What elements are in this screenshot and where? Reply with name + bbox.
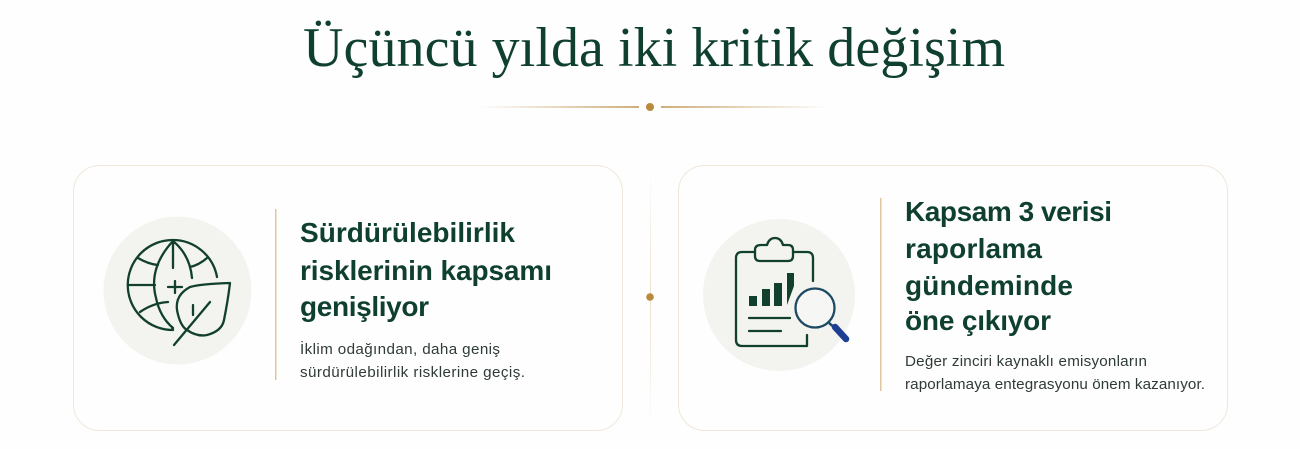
heading: Kapsam 3 verisi <box>905 196 1112 227</box>
text block <box>300 340 525 381</box>
icon: clipboard with chart and magnifier <box>703 219 855 371</box>
heading <box>300 217 552 322</box>
heading <box>905 196 1112 336</box>
text block: İklim odağından, daha geniş <box>300 340 500 358</box>
text block: sürdürülebilirlik risklerine geçiş. <box>300 364 525 381</box>
text block <box>905 353 1205 393</box>
panel: left card <box>74 166 622 430</box>
accent rule <box>880 198 882 391</box>
heading: genişliyor <box>300 291 429 322</box>
heading: gündeminde <box>905 270 1073 301</box>
title: Üçüncü yılda iki kritik değişim <box>303 17 1005 79</box>
heading: öne çıkıyor <box>905 305 1051 336</box>
text block: Değer zinciri kaynaklı emisyonların <box>905 353 1147 370</box>
heading: risklerinin kapsamı <box>300 255 552 286</box>
panel: right card <box>678 166 1228 430</box>
accent rule <box>275 209 276 380</box>
heading: raporlama <box>905 233 1042 264</box>
title ornament <box>480 103 829 111</box>
text block: raporlamaya entegrasyonu önem kazanıyor. <box>905 376 1205 393</box>
heading: Sürdürülebilirlik <box>300 217 515 248</box>
centre divider <box>646 166 654 430</box>
icon: globe and leaf <box>104 216 252 364</box>
